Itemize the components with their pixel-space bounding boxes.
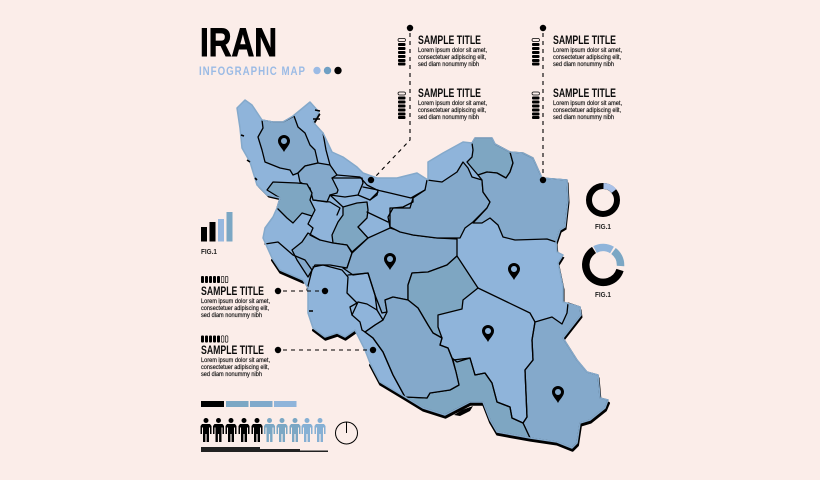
text block: left lower: Lorem ipsum dolor sit amet,: [201, 357, 270, 364]
pin 5: [552, 386, 564, 403]
text block: top right 2: [553, 88, 622, 121]
region borders: [265, 133, 535, 423]
text block: top middle 2: Lorem ipsum dolor sit amet,: [418, 100, 487, 107]
text block: top right 2: SAMPLE TITLE: [553, 88, 616, 100]
island: [454, 406, 473, 416]
text block: left upper: SAMPLE TITLE: [201, 286, 264, 298]
text block: top right 1: consectetuer adipiscing elit,: [553, 54, 621, 61]
text block: top middle 1: consectetuer adipiscing elit,: [418, 54, 486, 61]
text block: left lower: sed diam nonummy nibh: [201, 371, 262, 378]
bar chart: [201, 212, 232, 242]
map base: [237, 100, 608, 448]
horizontal meter 2: [201, 336, 228, 342]
people pictogram: [200, 418, 326, 442]
donut 1 label: FIG.1: [595, 224, 611, 231]
pin 2: [384, 253, 396, 270]
horizontal meter 1: [201, 276, 228, 283]
region: west teal: [267, 182, 315, 223]
clock icon: [336, 422, 358, 444]
coast shadow marks: [241, 110, 320, 311]
region: central teal: [332, 202, 368, 252]
text block: left lower: [201, 345, 270, 378]
text block: top middle 1: [418, 35, 487, 68]
text block: left upper: Lorem ipsum dolor sit amet,: [201, 298, 270, 305]
text block: left lower: SAMPLE TITLE: [201, 345, 264, 357]
text block: top middle 1: SAMPLE TITLE: [418, 35, 481, 47]
text block: left lower: consectetuer adipiscing elit,: [201, 364, 269, 371]
map of Iran: [237, 100, 610, 450]
text block: top middle 2: SAMPLE TITLE: [418, 88, 481, 100]
text block: left upper: consectetuer adipiscing elit,: [201, 305, 269, 312]
region: central large: [343, 228, 457, 313]
region: far north-east teal: [467, 138, 513, 178]
region: east north: [473, 152, 568, 242]
connector: left lower: [275, 347, 376, 353]
donut 2 label: FIG.1: [595, 292, 611, 299]
region: southern coast teal: [405, 358, 530, 438]
region: north central: [298, 163, 338, 202]
text block: top middle 1: sed diam nonummy nibh: [418, 61, 479, 68]
connector: left upper: [275, 288, 328, 294]
subtitle: INFOGRAPHIC MAP: [199, 64, 306, 78]
connector: top middle: [368, 25, 413, 183]
coast line: [237, 100, 608, 448]
region: central teal east: [408, 256, 478, 338]
vertical meter 4: [532, 92, 540, 119]
text block: top right 1: SAMPLE TITLE: [553, 35, 616, 47]
pin 3: [508, 263, 520, 280]
progress segments: [201, 401, 296, 407]
subtitle dots: [313, 67, 342, 74]
southern coast shadow: [272, 260, 608, 450]
vertical meter 2: [398, 92, 406, 119]
pictogram underline: [201, 447, 328, 452]
region: north-west: [258, 116, 318, 175]
region: south-west mid: [292, 233, 352, 277]
text block: top right 1: Lorem ipsum dolor sit amet,: [553, 47, 622, 54]
vertical meter 1: [398, 38, 406, 66]
donut chart 1: [589, 186, 617, 214]
text block: top right 1: sed diam nonummy nibh: [553, 61, 614, 68]
bar chart label: FIG.1: [201, 249, 217, 256]
text block: top right 1: [553, 35, 622, 68]
text block: left upper: sed diam nonummy nibh: [201, 312, 262, 319]
text block: top middle 1: Lorem ipsum dolor sit amet,: [418, 47, 487, 54]
region: north-east central: [390, 162, 490, 238]
title: IRAN: [200, 21, 277, 65]
pin 4: [482, 325, 494, 342]
text block: top right 2: sed diam nonummy nibh: [553, 114, 614, 121]
map shadow: [238, 102, 610, 450]
region: south-east: [523, 303, 608, 448]
region: south central: [365, 297, 459, 398]
vertical meter 3: [532, 38, 540, 66]
pin 1: [278, 135, 290, 152]
text block: top right 2: Lorem ipsum dolor sit amet,: [553, 100, 622, 107]
text block: top right 2: consectetuer adipiscing elit,: [553, 107, 621, 114]
text block: left upper: [201, 286, 270, 319]
donut chart 2: [586, 248, 621, 282]
text block: top middle 2: consectetuer adipiscing elit,: [418, 107, 486, 114]
connector: top right: [540, 25, 546, 183]
text block: top middle 2: [418, 88, 487, 121]
text block: top middle 2: sed diam nonummy nibh: [418, 114, 479, 121]
